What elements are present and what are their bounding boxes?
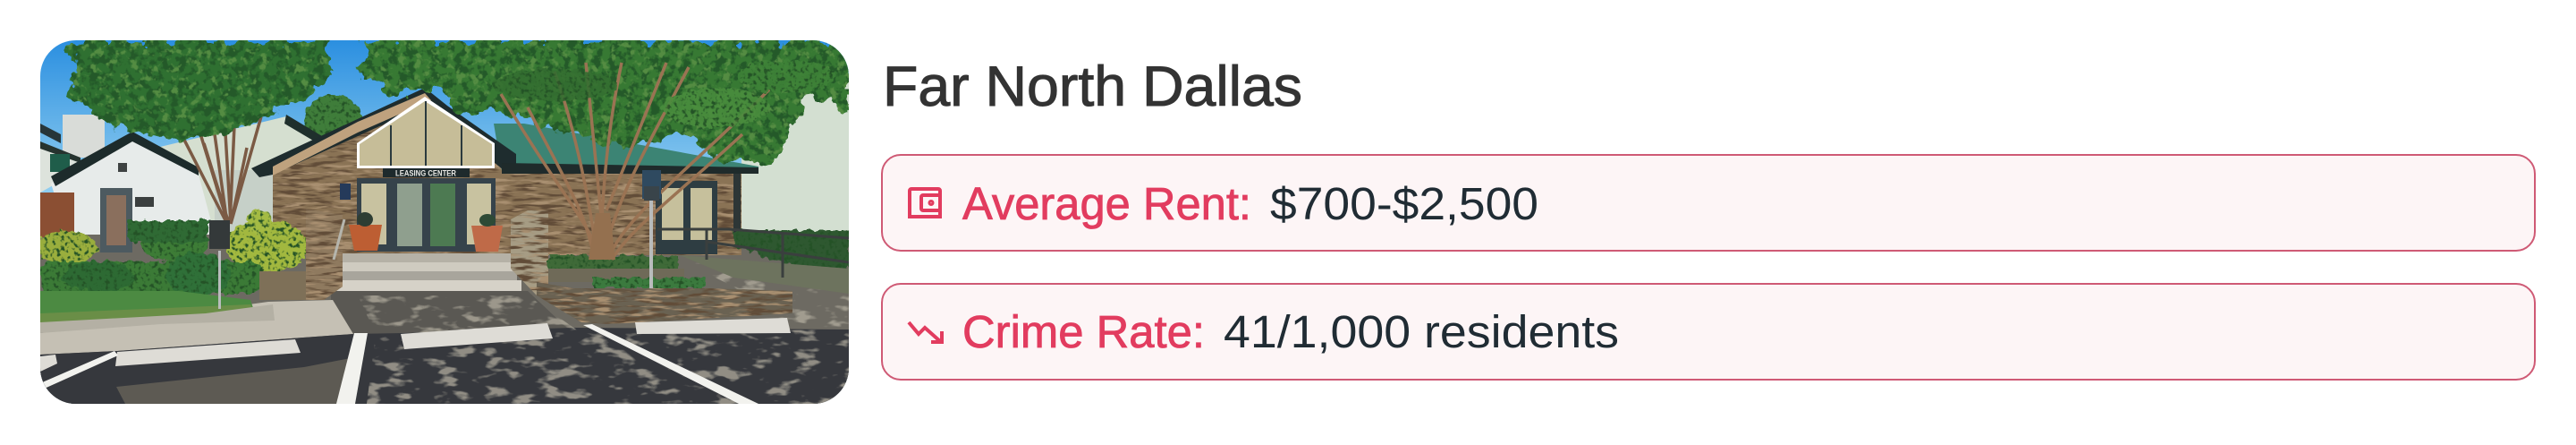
entry doors <box>340 178 496 252</box>
leasing center sign: LEASING CENTER <box>395 168 456 177</box>
left bushes <box>38 210 308 295</box>
flower bed <box>40 291 275 333</box>
background tree <box>304 93 363 136</box>
left white house <box>40 132 215 252</box>
brick planter <box>537 282 792 324</box>
chimney and left roofs <box>40 115 105 193</box>
right crape myrtle tree <box>360 40 849 260</box>
label: average rent: Average Rent: <box>962 178 1251 229</box>
dappled shade <box>358 262 849 404</box>
planters <box>349 212 503 252</box>
value: crime rate figure: 41/1,000 residents <box>1224 306 1619 357</box>
right ground concrete <box>537 260 849 340</box>
garden bed and fence right <box>548 229 849 294</box>
panel: crime rate <box>882 284 2535 380</box>
heading: Far North Dallas <box>883 56 1302 118</box>
label: crime rate: Crime Rate: <box>962 306 1205 357</box>
concrete curbs <box>40 318 791 372</box>
stone facade <box>273 123 741 255</box>
right white building <box>741 76 849 235</box>
tan gable panel <box>357 97 495 168</box>
central gable trim <box>251 88 516 177</box>
value: rent range: $700-$2,500 <box>1270 178 1538 229</box>
sidewalk <box>40 300 353 355</box>
green metal roof <box>494 124 758 172</box>
icon: wallet <box>910 189 940 217</box>
dark eave right <box>502 163 758 174</box>
parking stripes <box>40 324 758 404</box>
asphalt parking <box>40 328 849 404</box>
ground base <box>40 235 849 404</box>
paved forecourt <box>40 291 849 404</box>
brick retaining wall left <box>259 271 306 300</box>
parking signs <box>209 170 661 309</box>
left tree <box>72 40 336 224</box>
panel: average rent <box>882 155 2535 251</box>
white stone base and steps <box>334 253 521 291</box>
neighborhood card <box>40 40 2536 404</box>
right stone wall window <box>656 174 741 254</box>
back white building <box>161 116 313 220</box>
stone pillars <box>306 209 548 300</box>
sky <box>40 40 849 404</box>
photo: leasing center <box>38 40 849 404</box>
icon: trending down arrow <box>909 322 942 342</box>
